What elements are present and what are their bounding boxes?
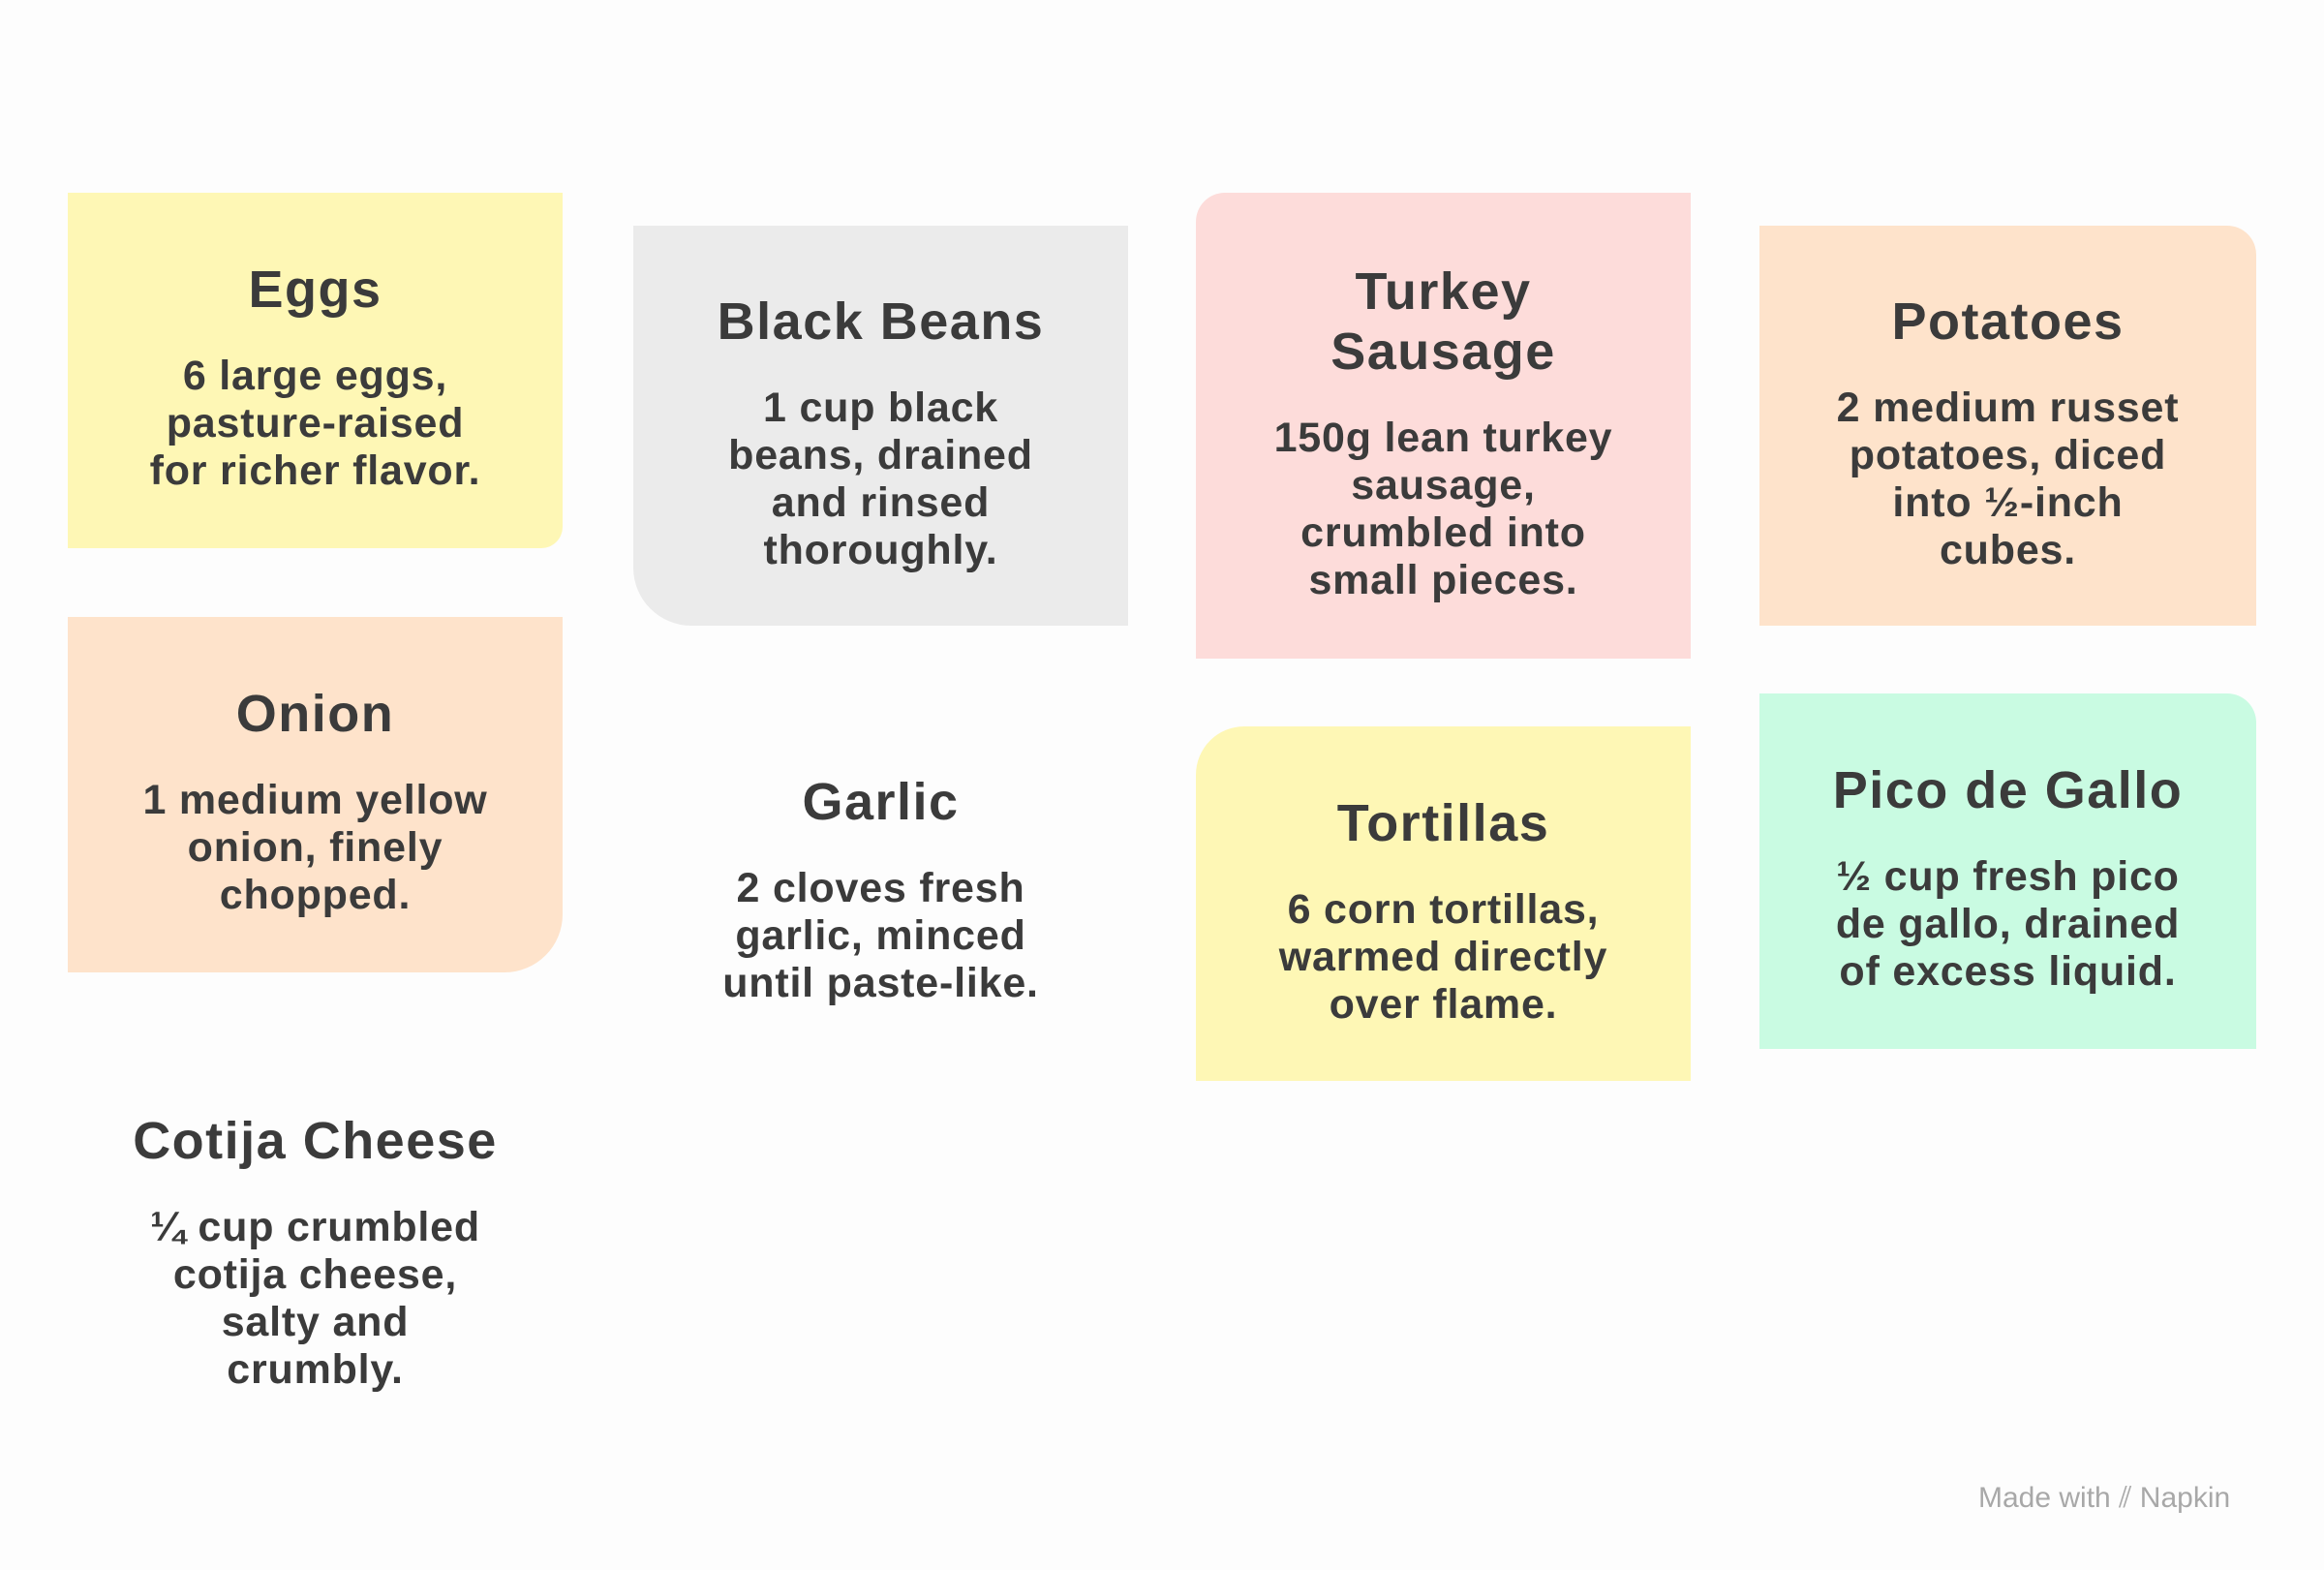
text: turkey sausage: small pieces. xyxy=(1308,556,1578,602)
text: garlic: 2 cloves fresh xyxy=(736,864,1025,910)
heading: garlic: Garlic xyxy=(802,773,960,831)
text: black beans: and rinsed xyxy=(772,478,990,525)
card: pico de gallo xyxy=(1759,693,2256,1049)
text: potatoes xyxy=(1837,384,2179,573)
card: black beans xyxy=(633,226,1128,626)
text: cotija cheese: cotija cheese, xyxy=(173,1251,457,1298)
heading: cotija cheese: Cotija Cheese xyxy=(133,1112,498,1170)
text: cotija cheese: crumbly. xyxy=(227,1346,404,1393)
text: eggs: for richer flavor. xyxy=(150,447,480,494)
card: tortillas xyxy=(1196,726,1691,1081)
text: onion: chopped. xyxy=(220,872,411,918)
text: onion: onion, finely xyxy=(188,824,443,871)
text: garlic: until paste-like. xyxy=(722,959,1039,1005)
text: eggs: pasture-raised xyxy=(167,400,464,446)
text: potatoes: 2 medium russet xyxy=(1837,384,2179,430)
text: cotija cheese xyxy=(150,1204,480,1393)
heading: potatoes: Potatoes xyxy=(1891,292,2125,351)
heading: pico de gallo: Pico de Gallo xyxy=(1833,761,2183,819)
heading: black beans: Black Beans xyxy=(718,292,1044,351)
card: potatoes xyxy=(1759,226,2256,626)
card: garlic xyxy=(722,773,1039,1005)
text: black beans: beans, drained xyxy=(728,432,1033,478)
text: onion xyxy=(142,777,488,918)
text: turkey sausage: sausage, xyxy=(1351,461,1536,508)
text: tortillas: warmed directly xyxy=(1279,934,1607,980)
card: cotija cheese xyxy=(133,1112,498,1393)
heading: eggs: Eggs xyxy=(248,261,382,319)
text: onion: 1 medium yellow xyxy=(142,777,488,823)
text: pico de gallo xyxy=(1836,853,2180,995)
text: black beans xyxy=(728,384,1033,573)
heading: turkey sausage: Turkey xyxy=(1355,262,1532,320)
text: eggs xyxy=(150,353,480,494)
card: turkey sausage xyxy=(1196,193,1691,659)
text: turkey sausage: crumbled into xyxy=(1300,509,1586,556)
card: onion xyxy=(68,617,563,972)
text: tortillas: 6 corn tortillas, xyxy=(1288,885,1599,932)
text: cotija cheese: salty and xyxy=(222,1299,409,1345)
footer: made with napkin: Made with ⫽ Napkin xyxy=(1978,1482,2230,1514)
text: black beans: 1 cup black xyxy=(763,384,998,430)
text: garlic: garlic, minced xyxy=(735,912,1026,959)
text: cotija cheese: ¼ cup crumbled xyxy=(150,1204,480,1250)
text: potatoes: cubes. xyxy=(1940,527,2076,573)
heading: tortillas: Tortillas xyxy=(1337,794,1549,852)
text: black beans: thoroughly. xyxy=(763,527,998,573)
text: potatoes: into ½-inch xyxy=(1892,478,2124,525)
text: potatoes: potatoes, diced xyxy=(1850,432,2166,478)
heading: turkey sausage xyxy=(1330,262,1556,380)
text: tortillas: over flame. xyxy=(1330,980,1557,1027)
text: turkey sausage xyxy=(1274,415,1612,602)
text: garlic xyxy=(722,864,1039,1005)
heading: turkey sausage: Sausage xyxy=(1330,322,1556,380)
card: eggs xyxy=(68,193,563,548)
text: pico de gallo: of excess liquid. xyxy=(1839,948,2177,995)
heading: onion: Onion xyxy=(236,685,394,743)
text: pico de gallo: ½ cup fresh pico xyxy=(1836,853,2180,900)
text: turkey sausage: 150g lean turkey xyxy=(1274,415,1612,461)
text: pico de gallo: de gallo, drained xyxy=(1836,901,2180,947)
text: eggs: 6 large eggs, xyxy=(183,353,447,399)
text: tortillas xyxy=(1278,885,1607,1027)
